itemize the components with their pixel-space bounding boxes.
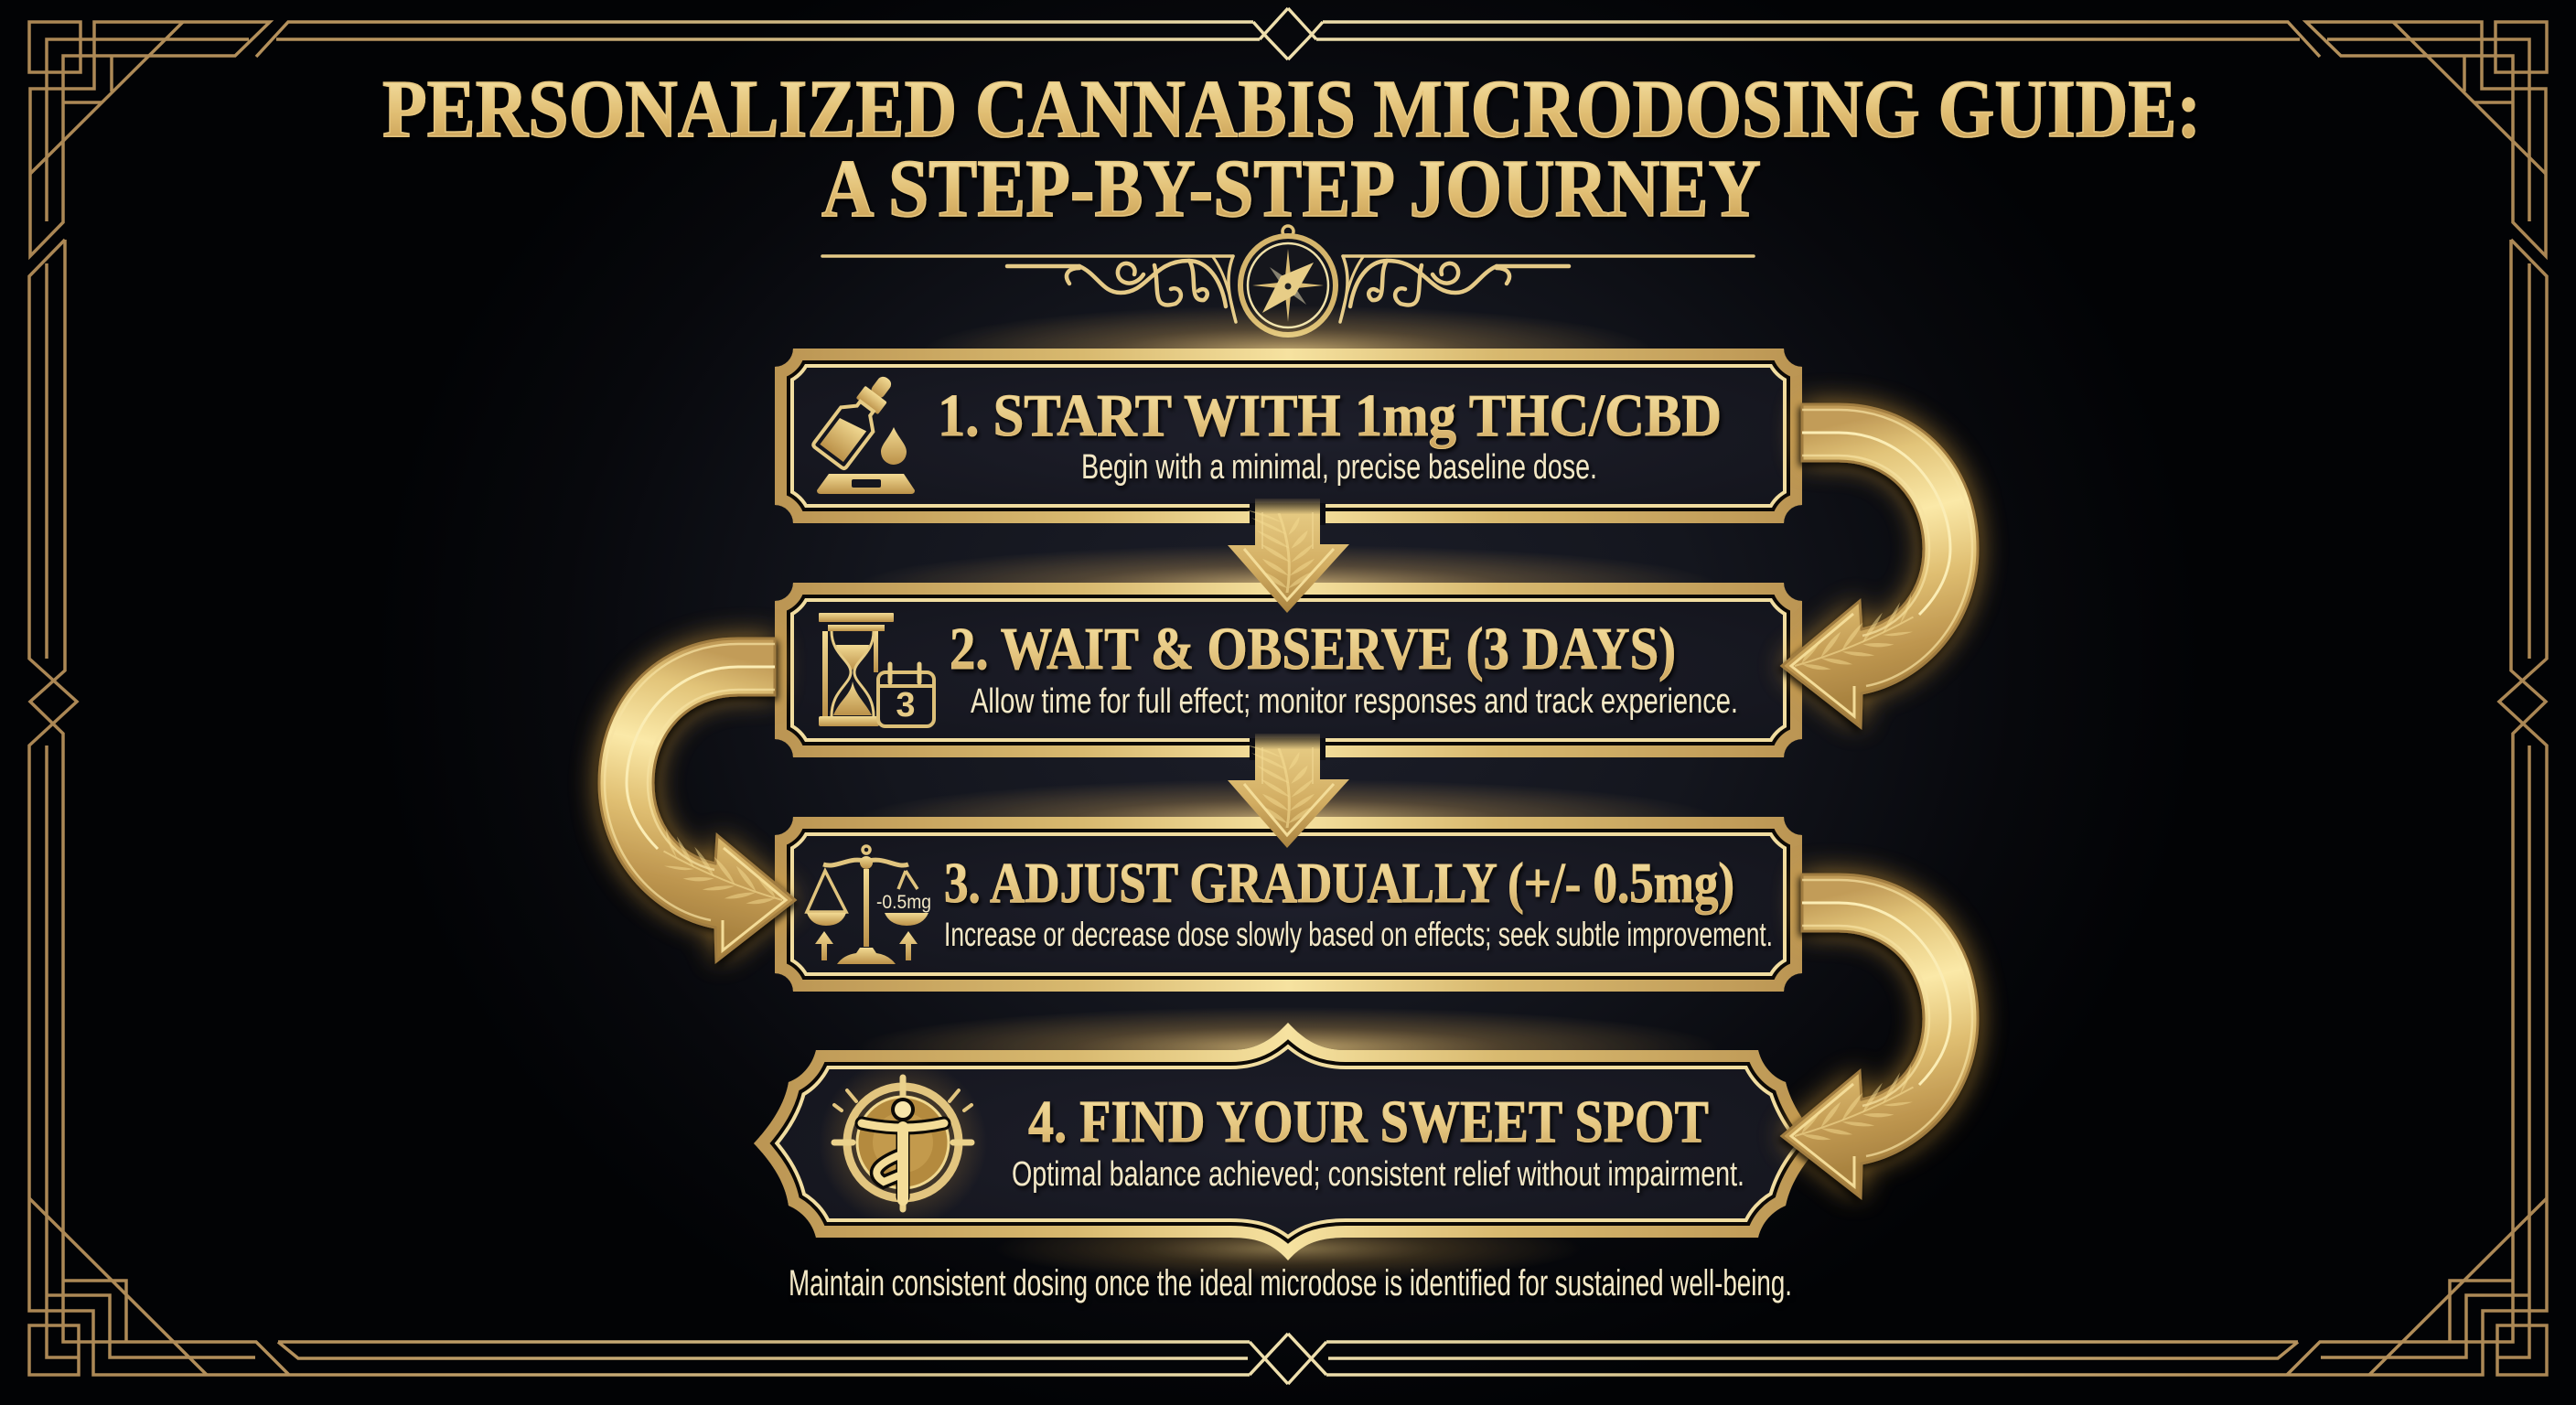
frame 4: [754, 1023, 1822, 1260]
icon: balance scale: -0.5mg: [876, 892, 931, 913]
description 1: Begin with a minimal, precise baseline dose.: [1081, 448, 1597, 487]
arrow: step 1 down to step 2: [1228, 499, 1349, 613]
compass ornament divider: [822, 226, 1754, 335]
curved arrow: right, panel 3 to panel 4: [1782, 874, 1978, 1197]
panel 2: wait and observe: [775, 583, 1802, 757]
icon: balance scale: [807, 846, 931, 964]
title: PERSONALIZED CANNABIS MICRODOSING GUIDE:: [382, 64, 2201, 155]
description 3: Increase or decrease dose slowly based on effects; seek subtle improvement.: [944, 916, 1773, 953]
arrow: step 2 down to step 3: [1228, 734, 1349, 848]
panel 3: adjust gradually: [775, 817, 1802, 992]
description 4: Optimal balance achieved; consistent relief without impairment.: [1012, 1155, 1744, 1194]
footer note: Maintain consistent dosing once the ideal microdose is identified for sustained well-being.: [789, 1263, 1792, 1303]
frame 3: [775, 817, 1802, 992]
heading 4: 4. FIND YOUR SWEET SPOT: [1028, 1089, 1709, 1155]
panel glows: [858, 306, 1718, 1282]
heading 1: 1. START WITH 1mg THC/CBD: [938, 382, 1722, 449]
heading 3: 3. ADJUST GRADUALLY (+/- 0.5mg): [944, 853, 1734, 915]
compass medallion: [1240, 226, 1336, 335]
curved arrow: left, panel 2 to panel 3: [599, 638, 795, 961]
curved arrow: right, panel 1 to panel 2: [1782, 404, 1978, 727]
frame 2: [775, 583, 1802, 757]
icon: balanced figure in target: [819, 1058, 987, 1227]
panel 4: find your sweet spot: [754, 1023, 1822, 1260]
icon: hourglass and calendar: 3: [896, 686, 916, 724]
title: A STEP-BY-STEP JOURNEY: [821, 144, 1761, 234]
icon: hourglass and calendar: [819, 613, 934, 726]
heading 2: 2. WAIT & OBSERVE (3 DAYS): [950, 616, 1676, 682]
frame 1: [775, 349, 1802, 523]
panel 1: start with 1mg: [775, 349, 1802, 523]
title: [382, 64, 2201, 234]
description 2: Allow time for full effect; monitor responses and track experience.: [971, 682, 1738, 721]
icon: dropper bottle on scale: [812, 367, 915, 494]
